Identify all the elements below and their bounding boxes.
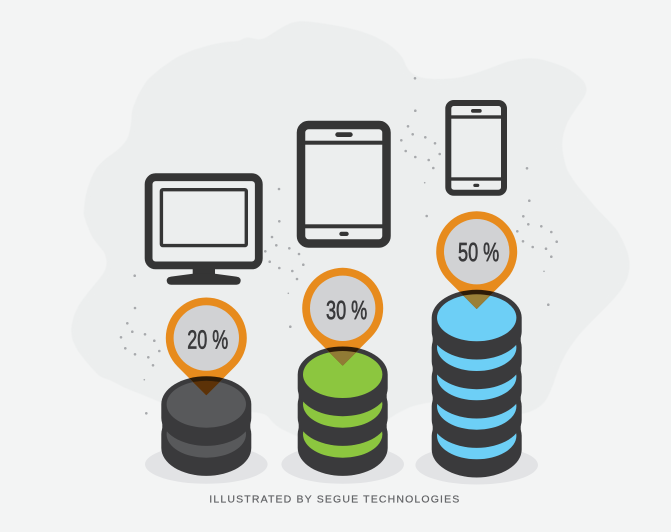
database stack: green, 3 discs — [298, 347, 388, 476]
shadow: right stack — [415, 446, 538, 484]
scattered dots — [120, 77, 558, 415]
map pin: 20 percent — [166, 298, 247, 395]
infographic — [120, 40, 558, 503]
icon: smartphone — [448, 103, 504, 193]
shadow: left stack — [145, 445, 268, 484]
icon: tablet — [301, 125, 386, 244]
map pin: 50 percent — [436, 211, 517, 309]
database stack: blue, 5 discs — [432, 290, 522, 478]
map pin: 30 percent: 30 % — [326, 295, 367, 325]
map pin: 30 percent — [302, 268, 383, 366]
map pin: 50 percent: 50 % — [458, 237, 499, 267]
credit line: ILLUSTRATED BY SEGUE TECHNOLOGIES — [209, 493, 459, 505]
background blob — [71, 21, 630, 437]
icon: desktop monitor — [149, 177, 259, 285]
database stack: grey, 2 discs — [161, 376, 251, 476]
map pin: 20 percent: 20 % — [187, 324, 228, 354]
shadow: middle stack — [281, 445, 404, 484]
